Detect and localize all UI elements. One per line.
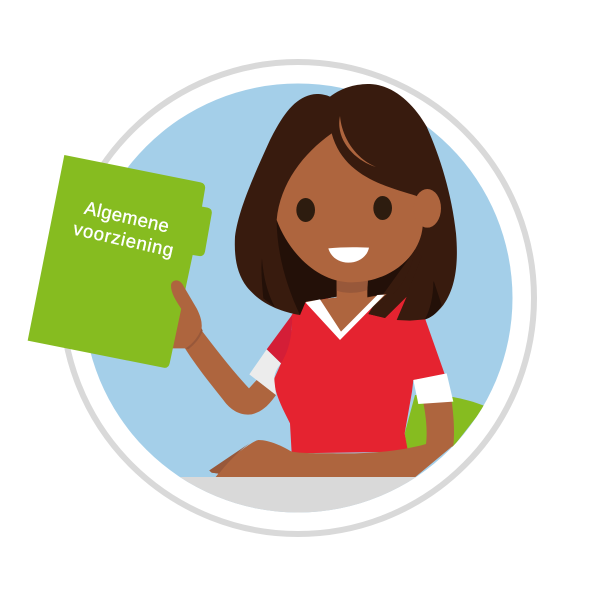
neck xyxy=(306,277,387,337)
thumb xyxy=(171,280,202,348)
illustration: woman holding folder xyxy=(28,59,537,537)
neck shadow xyxy=(337,281,368,293)
folder body xyxy=(28,155,212,368)
smile xyxy=(328,247,369,263)
hair and head xyxy=(235,84,457,340)
hair highlight xyxy=(339,116,376,167)
outer ring xyxy=(62,62,534,534)
wrist crease xyxy=(186,328,203,349)
folder label: voorziening xyxy=(71,218,175,261)
folder label xyxy=(71,197,175,261)
shirt body xyxy=(274,295,445,453)
palm xyxy=(167,297,202,348)
hair shade xyxy=(277,220,415,315)
left sleeve shade xyxy=(267,315,292,363)
blue background circle xyxy=(84,84,512,512)
ear xyxy=(414,189,441,228)
folder with hand xyxy=(28,155,212,368)
hair front right lock xyxy=(368,250,422,318)
hair strands shade xyxy=(261,258,442,319)
right cuff xyxy=(413,373,453,404)
face xyxy=(277,133,423,282)
torso and shirt xyxy=(185,295,454,477)
right eye xyxy=(373,196,392,220)
seated arm xyxy=(209,401,454,477)
hand shade xyxy=(209,443,249,474)
collar xyxy=(305,295,385,340)
left eye xyxy=(296,198,315,222)
folder label: Algemene xyxy=(83,197,171,236)
green bush and table xyxy=(180,394,484,512)
hair back xyxy=(235,84,457,321)
raised arm xyxy=(185,328,276,415)
left cuff xyxy=(249,349,281,395)
